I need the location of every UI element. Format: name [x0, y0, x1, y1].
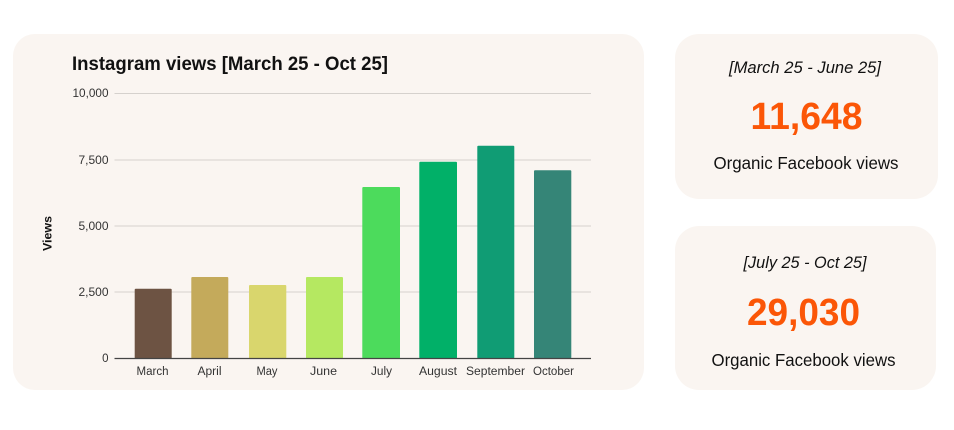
x axis labels: May — [256, 366, 278, 378]
y axis labels: 0 — [102, 353, 108, 365]
stat number: 11,648 — [750, 96, 862, 138]
y axis labels — [72, 88, 108, 365]
x axis labels: June — [310, 366, 337, 378]
date range: [March 25 - June 25] — [728, 59, 881, 77]
y axis labels: 10,000 — [72, 88, 108, 100]
panel: July to October stat — [675, 226, 936, 390]
y axis labels: 5,000 — [78, 221, 108, 233]
stat caption: Organic Facebook views — [714, 153, 899, 173]
x axis labels: July — [371, 366, 392, 378]
panel: Instagram views chart — [13, 34, 644, 390]
heading: chart title: Instagram views [March 25 - Oct 25] — [72, 53, 388, 75]
y axis labels: 7,500 — [78, 155, 108, 167]
x axis labels: September — [466, 366, 525, 378]
y axis labels: 2,500 — [78, 287, 108, 299]
x axis labels: March — [136, 366, 168, 378]
bar chart — [135, 146, 571, 359]
y axis title: Views — [40, 216, 54, 251]
x axis labels: April — [198, 366, 222, 378]
x axis labels — [136, 366, 574, 378]
panel: March to June stat — [675, 34, 938, 199]
stat number: 29,030 — [747, 292, 860, 334]
date range: [July 25 - Oct 25] — [743, 254, 867, 272]
stat caption: Organic Facebook views — [712, 350, 896, 370]
x axis labels: October — [533, 366, 574, 378]
x axis labels: August — [419, 366, 458, 378]
